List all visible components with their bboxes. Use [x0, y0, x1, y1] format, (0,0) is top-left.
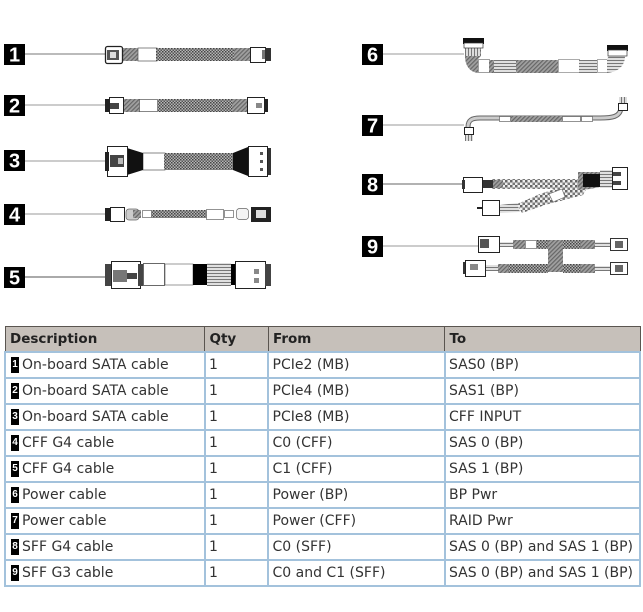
row 6: 1 — [209, 486, 218, 502]
cable 1: 1 — [9, 44, 20, 66]
row 4: CFF G4 cable — [22, 434, 114, 450]
row 2: 1 — [209, 382, 218, 398]
row 8: C0 (SFF) — [272, 538, 332, 554]
row 7: 7 — [12, 515, 18, 526]
table header: Qty — [210, 331, 236, 347]
row 8: 1 — [209, 538, 218, 554]
cable 1 — [4, 44, 271, 66]
row 9 — [11, 564, 633, 581]
row 3: 3 — [12, 411, 18, 422]
row 4: 1 — [209, 434, 218, 450]
row 9: SAS 0 (BP) and SAS 1 (BP) — [449, 564, 633, 580]
table header: Description — [10, 331, 97, 347]
row 6: 6 — [12, 489, 18, 500]
row 2 — [11, 382, 519, 399]
cable 6: 6 — [367, 44, 378, 66]
row 5 — [11, 460, 523, 477]
cable 7: 7 — [367, 116, 378, 138]
cable 3 — [4, 146, 271, 176]
cable 9: 9 — [367, 236, 378, 258]
row 3: On-board SATA cable — [22, 408, 169, 424]
table header — [6, 327, 640, 581]
cable 6 — [362, 38, 628, 73]
row 6: Power cable — [22, 486, 106, 502]
row 4: C0 (CFF) — [272, 434, 332, 450]
row 1: 1 — [12, 359, 18, 370]
row 1 — [11, 356, 519, 373]
cable 5: 5 — [9, 268, 20, 290]
row 1: 1 — [209, 356, 218, 372]
row 1: PCIe2 (MB) — [272, 356, 349, 372]
cable 3: 3 — [9, 150, 20, 172]
row 3 — [11, 408, 522, 425]
table header: From — [273, 331, 311, 347]
row 8: SFF G4 cable — [22, 538, 113, 554]
cable 7 — [362, 97, 628, 141]
row 8 — [11, 538, 633, 555]
row 9: C0 and C1 (SFF) — [272, 564, 385, 580]
row 7: RAID Pwr — [449, 512, 513, 528]
row 6: Power (BP) — [272, 486, 348, 502]
table header: To — [450, 331, 466, 347]
row 2: SAS1 (BP) — [449, 382, 519, 398]
cable illustrations — [4, 38, 628, 290]
cable 4 — [4, 204, 271, 226]
row 7 — [11, 512, 513, 529]
row 6 — [11, 486, 498, 503]
row 3: CFF INPUT — [449, 408, 521, 424]
row 7: Power (CFF) — [272, 512, 356, 528]
row 4: 4 — [12, 437, 18, 448]
row 9: 9 — [12, 567, 18, 578]
cable 2 — [4, 95, 268, 118]
row 1: On-board SATA cable — [22, 356, 169, 372]
row 5: CFF G4 cable — [22, 460, 114, 476]
row 4: SAS 0 (BP) — [449, 434, 523, 450]
cable 4: 4 — [9, 204, 21, 226]
cable 8 — [362, 168, 628, 216]
row 2: 2 — [12, 385, 18, 396]
cable table — [4, 326, 641, 587]
row 8: SAS 0 (BP) and SAS 1 (BP) — [449, 538, 633, 554]
row 3: PCIe8 (MB) — [272, 408, 349, 424]
row 9: SFF G3 cable — [22, 564, 113, 580]
row 7: Power cable — [22, 512, 106, 528]
cable 8: 8 — [367, 174, 378, 196]
row 4 — [11, 434, 523, 451]
cable 5 — [4, 262, 271, 290]
row 5: C1 (CFF) — [272, 460, 332, 476]
row 6: BP Pwr — [449, 486, 497, 502]
row 1: SAS0 (BP) — [449, 356, 519, 372]
row 9: 1 — [209, 564, 218, 580]
row 5: 1 — [209, 460, 218, 476]
row 3: 1 — [209, 408, 218, 424]
row 5: 5 — [12, 463, 18, 474]
cable 2: 2 — [9, 96, 20, 118]
row 2: PCIe4 (MB) — [272, 382, 349, 398]
row 8: 8 — [12, 541, 18, 552]
cable 9 — [362, 236, 628, 276]
row 5: SAS 1 (BP) — [449, 460, 523, 476]
row 2: On-board SATA cable — [22, 382, 169, 398]
row 7: 1 — [209, 512, 218, 528]
